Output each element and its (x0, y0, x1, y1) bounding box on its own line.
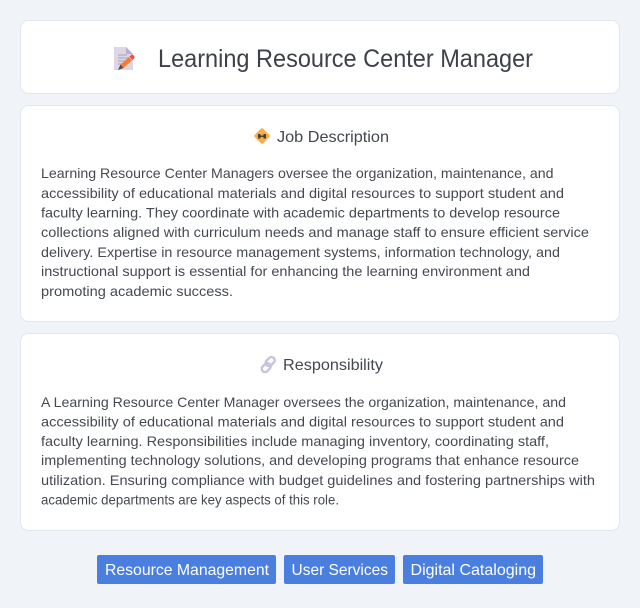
text block: responsibility: accessibility of educational materials and digital resources to support student and (41, 414, 564, 430)
tag: user services (284, 555, 395, 584)
text block: responsibility: faculty learning. Responsibilities include managing inventory, coordinating staff, (41, 433, 549, 449)
title: Learning Resource Center Manager (158, 45, 533, 73)
text block: job description: instructional support is essential for enhancing the learning environment and (41, 263, 530, 279)
text block: job description: promoting academic success. (41, 283, 233, 299)
panel: responsibility (20, 334, 620, 530)
text block: job description: faculty learning. They coordinate with academic departments to develop resource (41, 204, 560, 220)
text block: job description: accessibility of educational materials and digital resources to support student and (41, 185, 564, 201)
text block: responsibility: utilization. Ensuring compliance with budget guidelines and fostering partnerships with (41, 472, 595, 488)
panel: job description (20, 106, 620, 322)
tag: digital cataloging (403, 555, 543, 584)
text block: job description: collections aligned with curriculum needs and manage staff to ensure efficient service (41, 224, 589, 240)
tag: resource management (97, 555, 276, 584)
icon: document with pencil (114, 47, 135, 70)
tag: user services: User Services (292, 562, 388, 579)
text block: responsibility (41, 394, 595, 508)
heading: job description: Job Description (277, 129, 389, 146)
heading: responsibility: Responsibility (283, 357, 383, 374)
text block: job description: delivery. Expertise in resource management systems, information technology, and (41, 244, 560, 260)
panel: title card (20, 20, 620, 94)
tag: digital cataloging: Digital Cataloging (410, 562, 536, 579)
text block: job description: Learning Resource Center Managers oversee the organization, maintenance, and (41, 165, 554, 181)
text block: job description (41, 165, 589, 299)
icon: chain link (260, 356, 276, 373)
text block: responsibility: implementing technology solutions, and developing programs that enhance resource (41, 452, 579, 468)
icon: diamond sign (254, 128, 270, 144)
text block: responsibility: A Learning Resource Center Manager oversees the organization, maintenance, and (41, 394, 566, 410)
text block: responsibility: academic departments are key aspects of this role. (41, 492, 339, 508)
tag: resource management: Resource Management (105, 562, 270, 579)
